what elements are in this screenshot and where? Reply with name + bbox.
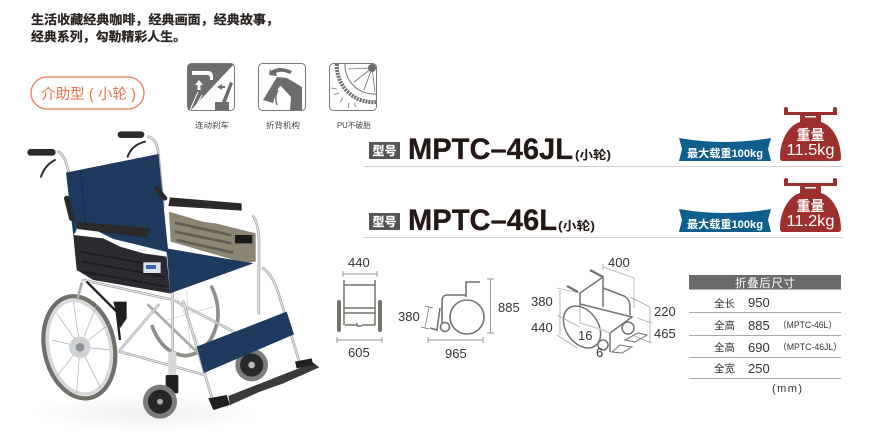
table rows: （MPTC-46JL） xyxy=(778,342,842,352)
feature labels: 折背机构 xyxy=(266,120,300,130)
weight icon: 重量 xyxy=(796,198,824,214)
table rows: 全长 xyxy=(714,297,735,310)
table header xyxy=(689,275,841,290)
badge: assisted type small wheel: 介助型 ( 小轮 ) xyxy=(41,86,136,103)
divider 2 xyxy=(364,237,843,238)
feature icon: PU tire xyxy=(330,64,376,110)
tube highlights xyxy=(58,137,299,408)
front caster xyxy=(143,352,178,419)
model tag: 型号 xyxy=(372,144,397,158)
headline text: 经典系列，勾勒精彩人生。 xyxy=(31,29,186,44)
model row 2: (小轮) xyxy=(558,218,595,233)
dimension diagram: side view: 965 xyxy=(445,346,467,361)
seat xyxy=(167,248,253,293)
capacity ribbon: 最大载重100kg xyxy=(687,146,763,160)
table rows xyxy=(714,295,842,395)
divider 1 xyxy=(364,166,843,167)
dimension diagram: perspective view xyxy=(531,255,676,360)
dimension diagram: perspective view: 6 xyxy=(596,345,603,360)
badge: assisted type small wheel xyxy=(31,77,144,109)
table rows: 全高 xyxy=(714,341,735,354)
dimension diagram: front view xyxy=(337,255,382,360)
far caster xyxy=(235,349,268,381)
table rows: 690 xyxy=(748,340,770,355)
model row 2: MPTC–46L xyxy=(408,204,557,237)
dimension diagram: front view: 605 xyxy=(348,345,370,360)
table rows: 全宽 xyxy=(714,362,735,375)
brake linkage xyxy=(87,282,120,340)
table rows: 950 xyxy=(748,295,770,310)
dimension diagram: perspective view: 465 xyxy=(654,326,676,341)
model row 1: (小轮) xyxy=(575,147,611,162)
frame tubes xyxy=(58,137,299,408)
dimension diagram: perspective view: 220 xyxy=(654,304,676,319)
feature labels: PU不破胎 xyxy=(337,120,371,130)
grips and brake levers xyxy=(31,135,165,218)
feature icon: folding mechanism xyxy=(258,64,306,110)
dimension diagram: perspective view: 16 xyxy=(578,328,592,343)
feature labels: 连动刹车 xyxy=(195,120,229,130)
weight icon: 11.2kg xyxy=(786,213,834,230)
dimension diagram: perspective view: 380 xyxy=(531,294,553,309)
folded size table xyxy=(689,275,842,395)
model row 1 xyxy=(369,107,841,166)
capacity ribbon: 最大载重100kg xyxy=(687,217,763,231)
weight icon xyxy=(780,107,841,161)
feature labels xyxy=(195,120,371,130)
near rear wheel xyxy=(34,290,124,405)
dimension diagram: perspective view: 440 xyxy=(531,320,553,335)
feature icon: linked brake xyxy=(188,64,234,110)
model row 2 xyxy=(369,178,841,237)
dimension diagram: side view: 885 xyxy=(498,300,520,315)
capacity ribbon xyxy=(679,209,771,232)
model row 1: MPTC–46JL xyxy=(408,133,573,166)
weight icon xyxy=(780,178,841,232)
table rows: （MPTC-46L） xyxy=(778,320,837,330)
far rear wheel xyxy=(152,286,218,356)
seat back xyxy=(66,154,168,252)
table rows: 全高 xyxy=(714,319,735,332)
weight icon: 重量 xyxy=(796,127,824,143)
table rows: (mm) xyxy=(772,383,802,395)
headline text xyxy=(31,12,279,44)
far side panel xyxy=(169,212,256,263)
armrests xyxy=(77,222,150,238)
wheelchair photo xyxy=(31,135,319,432)
headline text: 生活收藏经典咖啡，经典画面，经典故事， xyxy=(31,12,279,27)
model tag: 型号 xyxy=(372,215,397,229)
dimension diagram: perspective view: 400 xyxy=(608,255,630,270)
near side panel xyxy=(73,235,170,293)
dimension diagram: side view: 380 xyxy=(398,309,420,324)
footplates xyxy=(228,363,319,405)
model tag xyxy=(369,213,400,230)
table rows: 250 xyxy=(748,361,770,376)
table rows: 885 xyxy=(748,318,770,333)
model tag xyxy=(369,142,400,159)
calf strap xyxy=(197,312,294,373)
dimension diagram: side view xyxy=(398,279,520,361)
capacity ribbon xyxy=(679,138,771,161)
weight icon: 11.5kg xyxy=(786,142,834,159)
dimension diagram: front view: 440 xyxy=(348,255,370,270)
table header: 折叠后尺寸 xyxy=(735,276,795,290)
